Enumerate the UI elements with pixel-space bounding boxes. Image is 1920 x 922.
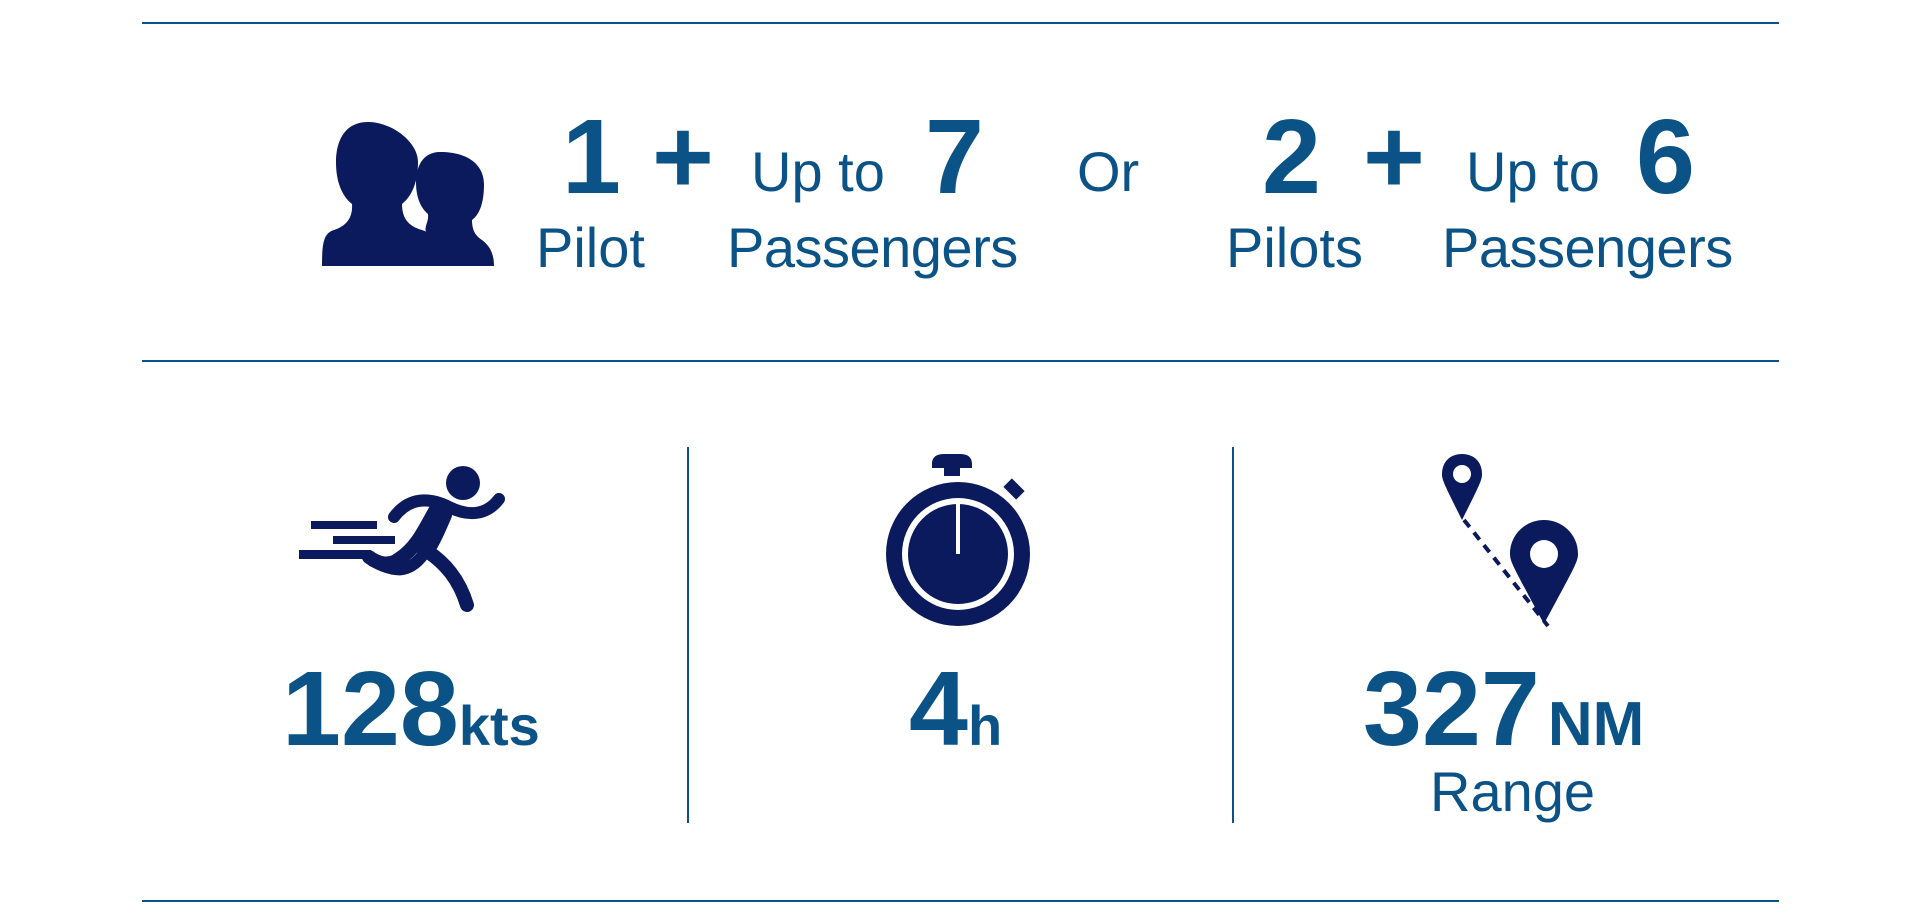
text: Pilot — [536, 216, 645, 279]
text: Passengers — [727, 216, 1018, 279]
text: Passengers — [1442, 216, 1733, 279]
text: 2 pilots: 2 — [1262, 98, 1321, 216]
text: 1 Pilot: 1 — [562, 98, 621, 216]
icon: stopwatch — [886, 454, 1030, 626]
icon: map pins — [1442, 454, 1578, 628]
text: up to 7 passengers: Up to — [751, 140, 885, 203]
stat: speed: 128kts — [282, 650, 540, 768]
text: up to 6 passengers: Up to — [1466, 140, 1600, 203]
stat: range: 327NM — [1363, 650, 1644, 768]
icon: runner — [299, 466, 505, 612]
plus 2: + — [1363, 98, 1425, 216]
plus 1: + — [652, 98, 714, 216]
text: 6 — [1636, 98, 1695, 216]
text: Range — [1430, 760, 1595, 823]
text: or: Or — [1077, 140, 1139, 203]
icon: people — [322, 122, 494, 266]
text: 7 — [925, 98, 984, 216]
text: Pilots — [1226, 216, 1363, 279]
stat: endurance: 4h — [909, 650, 1002, 768]
